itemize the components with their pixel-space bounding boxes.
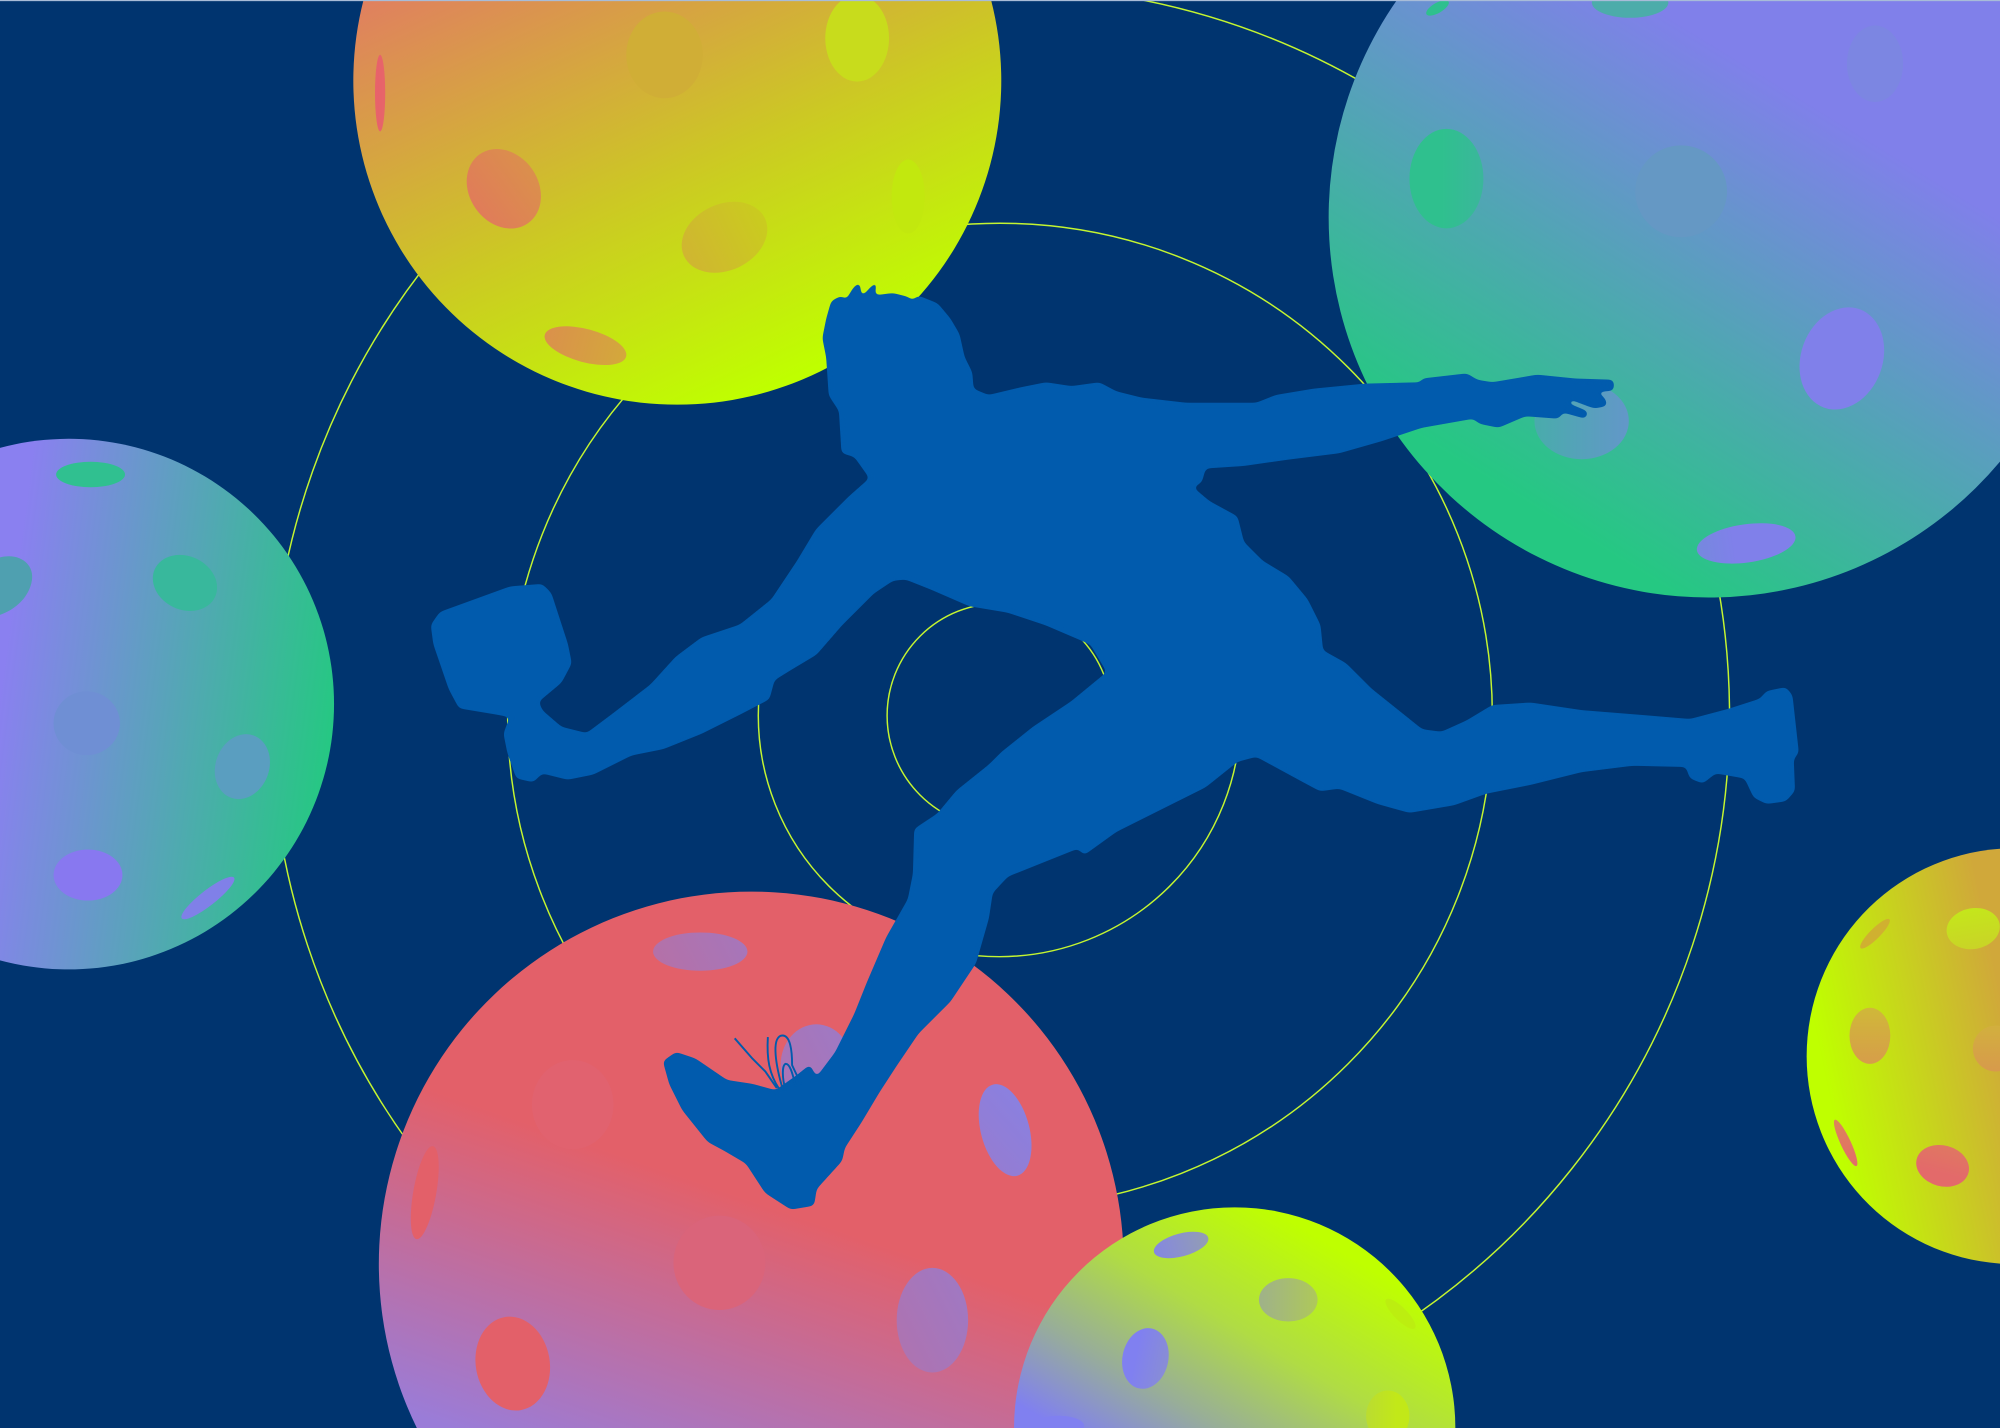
ball: purple-green top right bbox=[1329, 0, 2000, 597]
ball: lime bottom bbox=[1014, 1207, 1455, 1428]
ball: yellow top bbox=[353, 0, 1001, 405]
player silhouette bbox=[431, 281, 1798, 1209]
body and paddle bbox=[431, 281, 1798, 1209]
ball: purple-green left bbox=[0, 439, 334, 969]
concentric rings bbox=[270, 0, 1730, 1428]
shoelaces bbox=[735, 1036, 801, 1091]
top edge highlight bbox=[0, 0, 2000, 1]
ball: lime right bbox=[1807, 849, 2000, 1264]
ball: red bottom bbox=[379, 892, 1124, 1428]
